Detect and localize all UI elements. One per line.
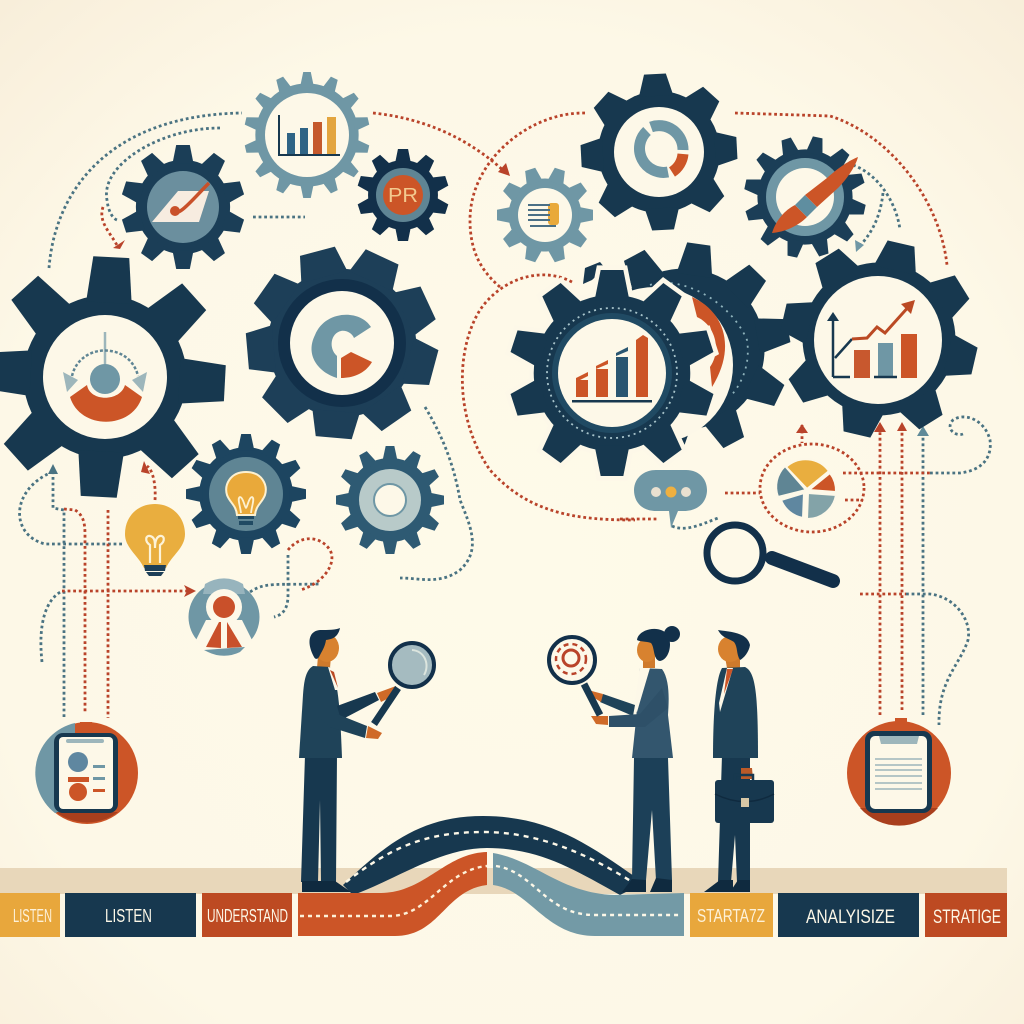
label: listen (yellow) bbox=[0, 893, 60, 937]
road: navy arc bbox=[343, 816, 644, 895]
icon: magnifying glass bbox=[707, 525, 833, 581]
label: listen (yellow): LISTEN bbox=[13, 906, 52, 926]
label: startatz bbox=[690, 893, 773, 937]
broken gear fragment bbox=[583, 262, 605, 284]
gear: small grey with note bbox=[484, 154, 606, 276]
bar chart bbox=[572, 335, 652, 402]
person: man with briefcase bbox=[704, 630, 774, 892]
briefcase bbox=[715, 775, 774, 823]
arms bbox=[337, 692, 379, 720]
legs bbox=[632, 758, 672, 880]
magnifier bbox=[374, 643, 434, 724]
label: analysize: ANALYISIZE bbox=[806, 907, 895, 928]
label: stratige bbox=[925, 893, 1007, 937]
gear: top right with donut bbox=[577, 70, 741, 234]
gear: lightbulb bbox=[186, 434, 306, 554]
growth chart bbox=[827, 300, 917, 378]
icon: lightbulb bbox=[125, 504, 185, 576]
C chart icon bbox=[312, 315, 372, 378]
head and hair bbox=[725, 657, 740, 668]
legs bbox=[718, 755, 750, 882]
label: understand bbox=[202, 893, 292, 937]
neck and head bbox=[317, 656, 331, 668]
gear: large left with gauge bbox=[0, 251, 231, 503]
note icon bbox=[528, 203, 559, 226]
head and hair bbox=[643, 655, 655, 668]
label: startatz: STARTA7Z bbox=[697, 906, 765, 926]
jacket bbox=[713, 667, 758, 758]
hand bbox=[741, 768, 753, 779]
dotted connector lines bbox=[20, 113, 990, 725]
jacket bbox=[632, 668, 673, 758]
label: listen (navy) bbox=[65, 893, 196, 937]
gear: grey hub bbox=[336, 446, 444, 554]
label bars bbox=[0, 893, 1007, 937]
label: analysize bbox=[778, 893, 919, 937]
gear: small with PR badge bbox=[357, 149, 449, 241]
badge letters: PR bbox=[388, 185, 418, 207]
road: grey bbox=[493, 853, 684, 936]
gear: pencil bbox=[733, 125, 877, 269]
label: stratige: STRATIGE bbox=[933, 907, 1001, 928]
person: man with magnifier bbox=[299, 628, 434, 892]
icon: phone card bbox=[35, 722, 138, 824]
icon: pie chart bbox=[776, 459, 836, 519]
check note icon bbox=[152, 183, 209, 222]
ground band bbox=[0, 868, 1007, 894]
arms bbox=[600, 694, 635, 716]
gear: center with C chart bbox=[223, 226, 462, 462]
jacket bbox=[299, 666, 342, 758]
pencil icon bbox=[772, 157, 858, 233]
icon: chat bubble bbox=[634, 470, 707, 528]
road: orange bbox=[298, 852, 487, 936]
donut chart bbox=[640, 126, 683, 172]
magnifier bbox=[549, 637, 600, 715]
label: understand: UNDERSTAND bbox=[207, 906, 288, 926]
gear: top grey with bar chart bbox=[244, 72, 370, 198]
icon: keyhole badge bbox=[188, 578, 260, 656]
bulb icon bbox=[226, 472, 266, 525]
bar chart bbox=[279, 115, 340, 155]
gear: top left with check bbox=[121, 145, 245, 269]
legs bbox=[301, 755, 337, 882]
icon: clipboard bbox=[847, 718, 951, 826]
gear: front middle with bar chart bbox=[509, 270, 715, 476]
person: woman with magnifier bbox=[549, 626, 680, 892]
label: listen (navy): LISTEN bbox=[105, 906, 152, 926]
orange arc bbox=[692, 297, 725, 387]
gear: right with growth chart bbox=[761, 221, 997, 457]
arrowheads bbox=[48, 163, 929, 597]
gauge icon bbox=[63, 332, 147, 422]
gear: rear middle with arc bbox=[564, 229, 804, 469]
